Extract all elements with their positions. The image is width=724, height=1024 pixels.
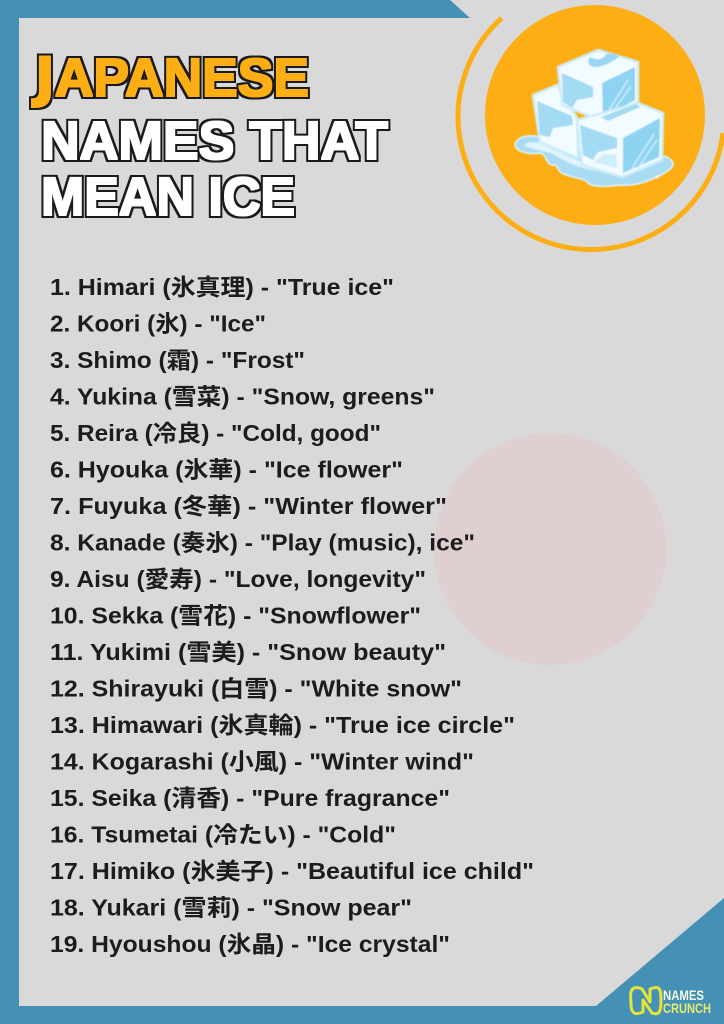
name 4: 4. Yukina (雪菜) - "Snow, greens" [50,384,435,410]
name 7: 7. Fuyuka (冬華) - "Winter flower" [50,493,447,519]
right cube [577,103,663,177]
logo wordmark: NAMES [663,987,704,1003]
decorative pink circle [434,433,666,665]
icon: ice cubes [515,50,673,186]
name 13: 13. Himawari (氷真輪) - "True ice circle" [50,712,515,738]
logo wordmark [663,987,711,1016]
name 9: 9. Aisu (愛寿) - "Love, longevity" [50,566,426,592]
name 10: 10. Sekka (雪花) - "Snowflower" [50,602,421,628]
name 14: 14. Kogarashi (小風) - "Winter wind" [50,748,474,774]
title: NAMES THAT [41,111,388,171]
title [31,46,388,227]
left cube [533,85,578,158]
top cube [558,50,638,121]
names list [50,274,534,957]
icon: orange ring [458,18,723,250]
name 6: 6. Hyouka (氷華) - "Ice flower" [50,456,403,482]
name 17: 17. Himiko (氷美子) - "Beautiful ice child" [50,858,534,884]
icon: orange circle [485,5,705,225]
name 16: 16. Tsumetai (冷たい) - "Cold" [50,822,396,848]
name 15: 15. Seika (清香) - "Pure fragrance" [50,785,450,811]
title: JAPANESE [31,46,309,109]
name 18: 18. Yukari (雪莉) - "Snow pear" [50,894,412,920]
name 19: 19. Hyoushou (氷晶) - "Ice crystal" [50,931,450,957]
name 12: 12. Shirayuki (白雪) - "White snow" [50,676,462,702]
name 2: 2. Koori (氷) - "Ice" [50,310,266,336]
name 3: 3. Shimo (霜) - "Frost" [50,347,305,373]
name 5: 5. Reira (冷良) - "Cold, good" [50,420,381,446]
name 8: 8. Kanade (奏氷) - "Play (music), ice" [50,530,475,556]
title: MEAN ICE [41,167,295,227]
name 1: 1. Himari (氷真理) - "True ice" [50,274,394,300]
name 11: 11. Yukimi (雪美) - "Snow beauty" [50,639,446,665]
icon: logo mark [631,988,661,1014]
logo: Names Crunch [631,987,711,1016]
logo wordmark: CRUNCH [663,1000,711,1016]
